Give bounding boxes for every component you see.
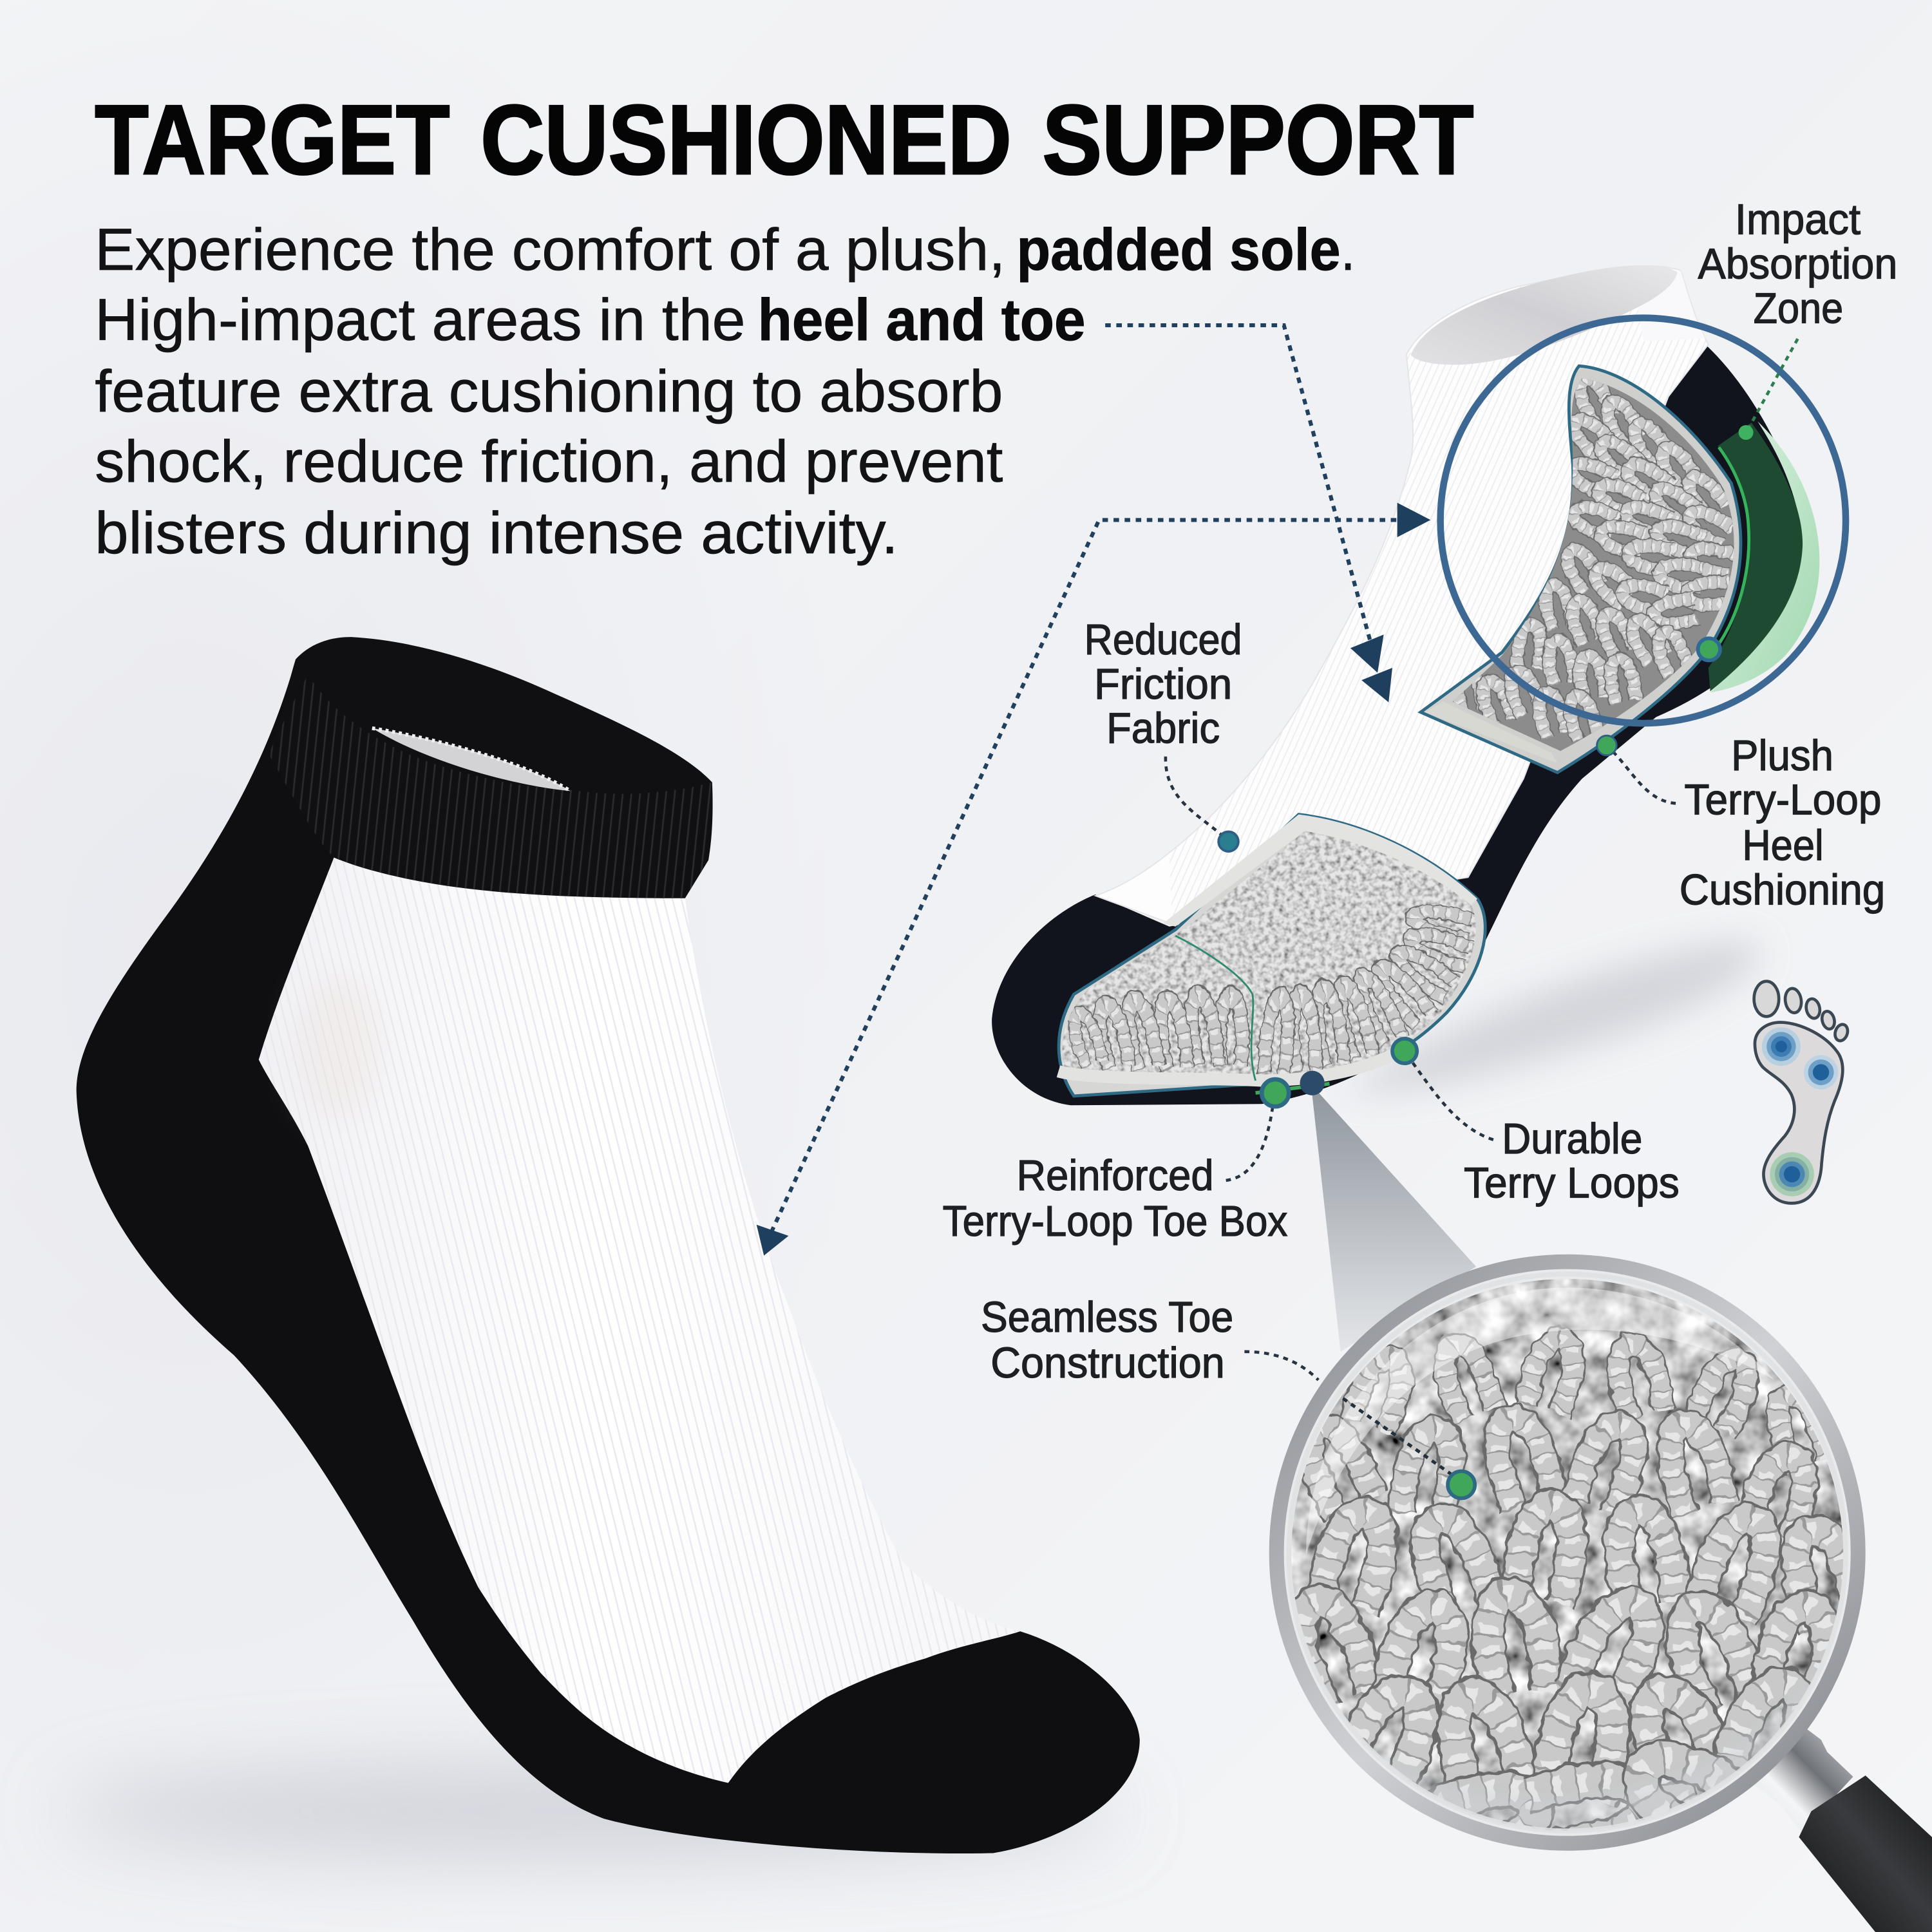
large black and white sock	[77, 637, 1140, 1853]
description text	[95, 217, 1356, 566]
label: impact absorption zone: Zone	[1754, 284, 1843, 332]
description text: heel and toe	[758, 287, 1086, 353]
description text: Experience the comfort of a plush,	[95, 217, 1005, 283]
terry loop close-up	[1292, 1279, 1843, 1831]
description text: shock, reduce friction, and prevent	[95, 429, 1003, 495]
arrow: double ended link between socks	[757, 503, 1430, 1256]
sock sole and heel	[992, 345, 1807, 1105]
title: SUPPORT	[1043, 85, 1473, 195]
label: impact absorption zone	[1698, 196, 1897, 440]
heel dot	[1698, 638, 1720, 661]
label: impact absorption zone: Impact	[1735, 196, 1861, 244]
label: plush terry-loop heel cushioning	[1597, 732, 1885, 914]
label: plush terry-loop heel cushioning: Cushioning	[1680, 866, 1885, 914]
cutaway sock illustration	[992, 265, 1846, 1105]
title	[95, 85, 1473, 195]
arrow: heel and toe callout	[1105, 325, 1392, 703]
label: seamless toe construction: Construction	[990, 1339, 1225, 1387]
title: CUSHIONED	[480, 85, 1012, 195]
label: seamless toe construction: Seamless Toe	[981, 1293, 1233, 1341]
seamless toe pointer	[1343, 1399, 1475, 1499]
label: reduced friction fabric: Friction	[1094, 660, 1232, 708]
toe cutaway	[1058, 815, 1490, 1096]
description text: feature extra cushioning to absorb	[95, 359, 1003, 424]
description text: .	[1341, 217, 1356, 283]
light green impact crescent	[1710, 421, 1819, 692]
label: reinforced terry-loop toe box: Reinforced	[1016, 1151, 1214, 1200]
magnifying glass	[1276, 1262, 1932, 1932]
green accent on toe edge	[1256, 1084, 1329, 1093]
label: durable terry loops	[1392, 1039, 1680, 1208]
label: reduced friction fabric	[1084, 616, 1242, 851]
sock opening	[1411, 265, 1678, 365]
label: reinforced terry-loop toe box: Terry-Loop Toe Box	[943, 1197, 1287, 1245]
description text: blisters during intense activity.	[95, 500, 898, 566]
label: impact absorption zone: Absorption	[1698, 240, 1897, 288]
title: TARGET	[95, 85, 450, 195]
label: plush terry-loop heel cushioning: Heel	[1742, 821, 1824, 869]
blue detail circle	[1441, 318, 1846, 723]
description text: High-impact areas in the	[95, 287, 746, 353]
shadow under large sock	[62, 1762, 1121, 1861]
label: seamless toe construction	[981, 1293, 1318, 1387]
shadow under cutaway sock	[1343, 942, 1760, 1092]
description text: padded sole	[1016, 217, 1341, 283]
label: reduced friction fabric: Fabric	[1106, 705, 1220, 753]
sock cuff	[269, 637, 713, 898]
toe marker dot	[1300, 1071, 1325, 1095]
sock white upper	[1095, 266, 1709, 924]
label: reinforced terry-loop toe box	[943, 1079, 1289, 1245]
label: plush terry-loop heel cushioning: Plush	[1731, 732, 1833, 780]
cone from toe to magnifier	[1311, 1084, 1476, 1352]
magnifier handle	[1752, 1728, 1932, 1932]
dark green impact crescent	[1709, 422, 1803, 691]
foot pressure icon	[1754, 981, 1850, 1203]
label: durable terry loops: Durable	[1502, 1115, 1642, 1163]
label: reduced friction fabric: Reduced	[1084, 616, 1242, 664]
label: durable terry loops: Terry Loops	[1464, 1159, 1680, 1208]
label: plush terry-loop heel cushioning: Terry-Loop	[1684, 776, 1882, 824]
heel cutaway	[1421, 366, 1754, 773]
